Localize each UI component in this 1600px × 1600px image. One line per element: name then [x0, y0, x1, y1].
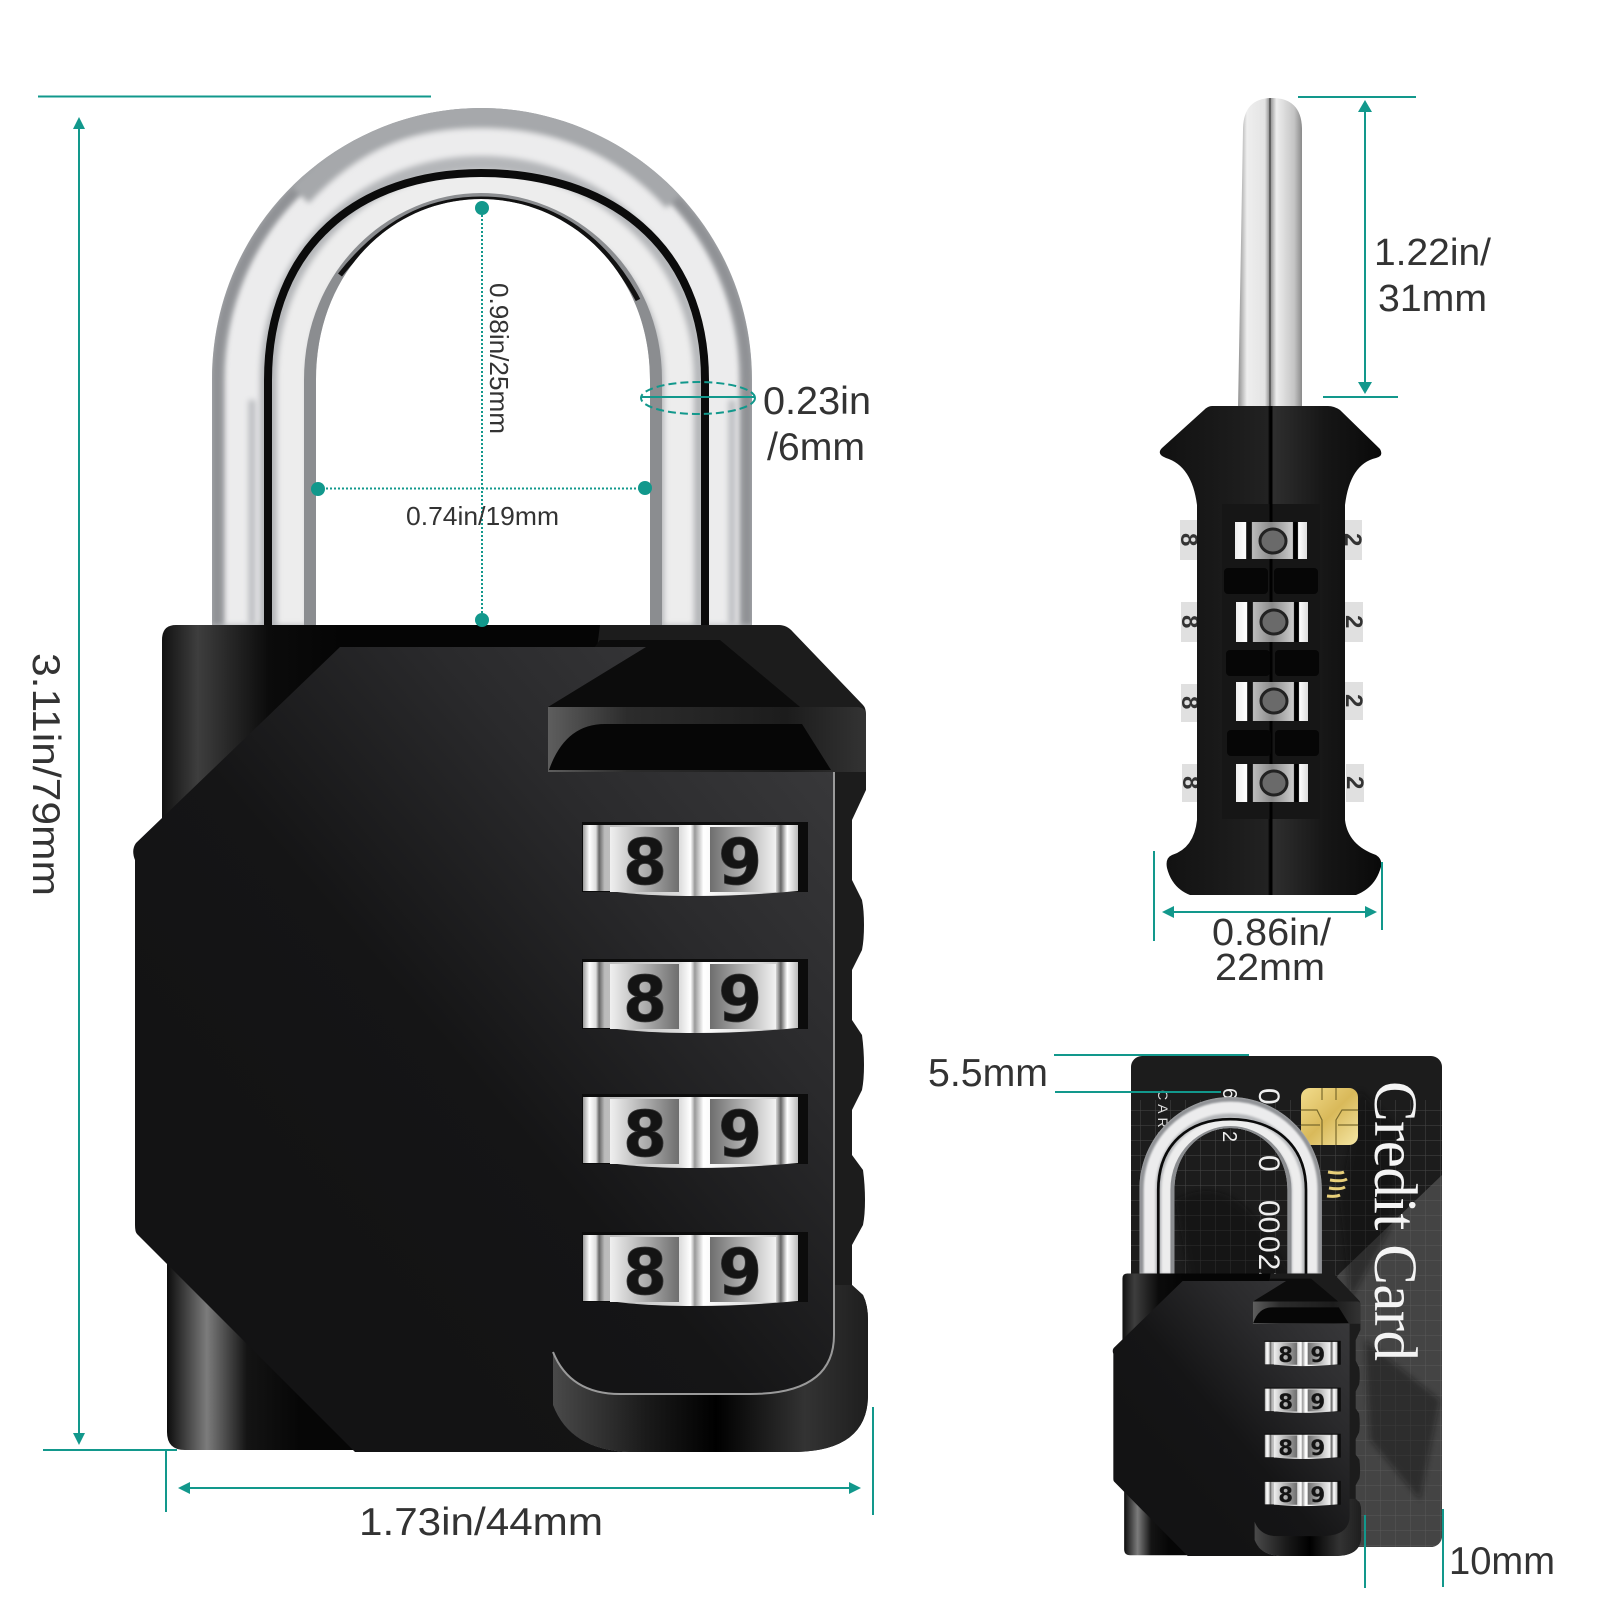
mini lower back	[1124, 1487, 1203, 1555]
mini wedge	[1253, 1279, 1338, 1302]
side dial 3	[1236, 682, 1308, 721]
side dial 1	[1235, 522, 1307, 559]
card gap dimension 10mm	[1365, 1509, 1555, 1588]
card number: 0	[1252, 1088, 1285, 1105]
side tabs right: 2	[1339, 533, 1366, 546]
main lock overall height dimension	[24, 96, 431, 1450]
mini case side	[1254, 1274, 1361, 1556]
cap cutout	[549, 724, 831, 770]
upper back of body	[162, 625, 700, 1000]
side shackle	[1238, 98, 1302, 410]
10mm label: 10mm	[1449, 1540, 1555, 1583]
front plate with dial recess	[133, 647, 834, 1452]
card small number	[1218, 1088, 1240, 1142]
dial row 3: 9	[718, 1098, 762, 1171]
card title: Credit Card	[1361, 1081, 1428, 1361]
side tabs right: 2	[1340, 615, 1367, 628]
side view width dimension: 22mm	[1215, 947, 1325, 989]
side view width dimension	[1154, 851, 1382, 989]
side tabs left: 8	[1176, 696, 1203, 709]
mini dial 2	[1264, 1388, 1341, 1415]
dial row 4: 9	[718, 1236, 762, 1309]
dial row 3: 8	[623, 1098, 667, 1171]
dial row 4: 8	[623, 1236, 667, 1309]
mini top cap	[1253, 1302, 1360, 1324]
side tabs left: 8	[1177, 776, 1204, 789]
mini dial 1: 8	[1278, 1343, 1293, 1368]
contactless icon	[1327, 1172, 1347, 1196]
side width label: 0.86in/	[1212, 912, 1331, 954]
side window	[1222, 504, 1320, 819]
mini shackle	[1135, 1094, 1328, 1275]
dial row 1: 9	[718, 826, 762, 899]
mini dial 2: 9	[1310, 1390, 1325, 1415]
card world map shading	[1175, 1090, 1440, 1500]
shackle inner height dimension	[475, 201, 514, 627]
shackle thickness dimension: /6mm	[767, 426, 865, 469]
mini dial 1: 9	[1310, 1343, 1325, 1368]
main padlock	[133, 100, 868, 1452]
card base	[1131, 1056, 1442, 1547]
dial row 1: 8	[623, 826, 667, 899]
mini bottom cap	[1255, 1499, 1361, 1556]
shackle thickness dimension	[641, 380, 871, 469]
centre seam	[1270, 406, 1272, 895]
side view shackle height dimension: 31mm	[1378, 278, 1487, 320]
dial row 3	[582, 1094, 808, 1171]
window tabs	[1224, 568, 1319, 756]
dark wedge above dial cap	[548, 640, 800, 707]
side tabs left	[1175, 520, 1204, 802]
divider highlight	[553, 772, 834, 1394]
mini body back	[1122, 1274, 1304, 1402]
mini dial 4: 9	[1310, 1483, 1325, 1508]
mini dial 3: 9	[1310, 1436, 1325, 1461]
mini dial 4	[1264, 1481, 1341, 1508]
side dial 4	[1236, 764, 1308, 802]
side tabs left: 8	[1175, 533, 1202, 546]
inner height label: 0.98in/25mm	[484, 283, 514, 434]
card chip	[1301, 1088, 1358, 1145]
card number: 0	[1252, 1155, 1285, 1172]
card holder text: CARD	[1155, 1090, 1171, 1146]
side body	[1160, 406, 1381, 895]
mini front plate	[1113, 1281, 1350, 1556]
card small number: 2	[1218, 1131, 1240, 1142]
side tabs right: 2	[1340, 694, 1367, 707]
dial row 4	[582, 1232, 808, 1309]
mini dial 3: 8	[1278, 1436, 1293, 1461]
bottom dial cap	[553, 1285, 868, 1452]
mini cutout	[1253, 1307, 1349, 1323]
dial row 2	[582, 959, 808, 1036]
dial row 2: 8	[623, 963, 667, 1036]
mini dial 2: 8	[1278, 1390, 1293, 1415]
shackle height label: 1.22in/	[1374, 232, 1491, 274]
card grid	[1131, 1100, 1442, 1547]
top dial cap	[548, 707, 866, 772]
credit card	[1131, 1056, 1442, 1560]
side view padlock	[1160, 98, 1381, 895]
dial row 1	[582, 822, 808, 899]
card number: 022	[1252, 1236, 1285, 1289]
inner width label: 0.74in/19mm	[406, 501, 559, 531]
card number	[1252, 1088, 1285, 1289]
main shackle	[200, 100, 770, 630]
mini dial 3	[1264, 1434, 1341, 1461]
card gap dimension 5.5mm	[928, 1052, 1249, 1095]
miniature padlock on card	[1113, 1094, 1361, 1556]
card light triangle	[1337, 1175, 1442, 1547]
shackle inner width dimension	[311, 481, 652, 531]
side tabs right: 2	[1341, 776, 1368, 789]
5.5mm label: 5.5mm	[928, 1052, 1048, 1095]
side view shackle height dimension	[1298, 97, 1491, 397]
right side of case with grip bumps	[552, 625, 868, 1452]
width label: 1.73in/44mm	[359, 1501, 603, 1544]
side dial 2	[1236, 602, 1308, 642]
side tabs right	[1339, 520, 1368, 802]
mini dial 4: 8	[1278, 1483, 1293, 1508]
main lock width dimension	[166, 1407, 873, 1544]
card small number: 6	[1218, 1088, 1240, 1099]
card number: 00	[1252, 1200, 1285, 1233]
dial row 2: 9	[718, 963, 762, 1036]
height label: 3.11in/79mm	[24, 653, 67, 896]
lower back of body	[167, 1250, 400, 1450]
mini dial 1	[1264, 1341, 1341, 1368]
side tabs left: 8	[1176, 615, 1203, 628]
thickness label: 0.23in	[763, 380, 871, 423]
